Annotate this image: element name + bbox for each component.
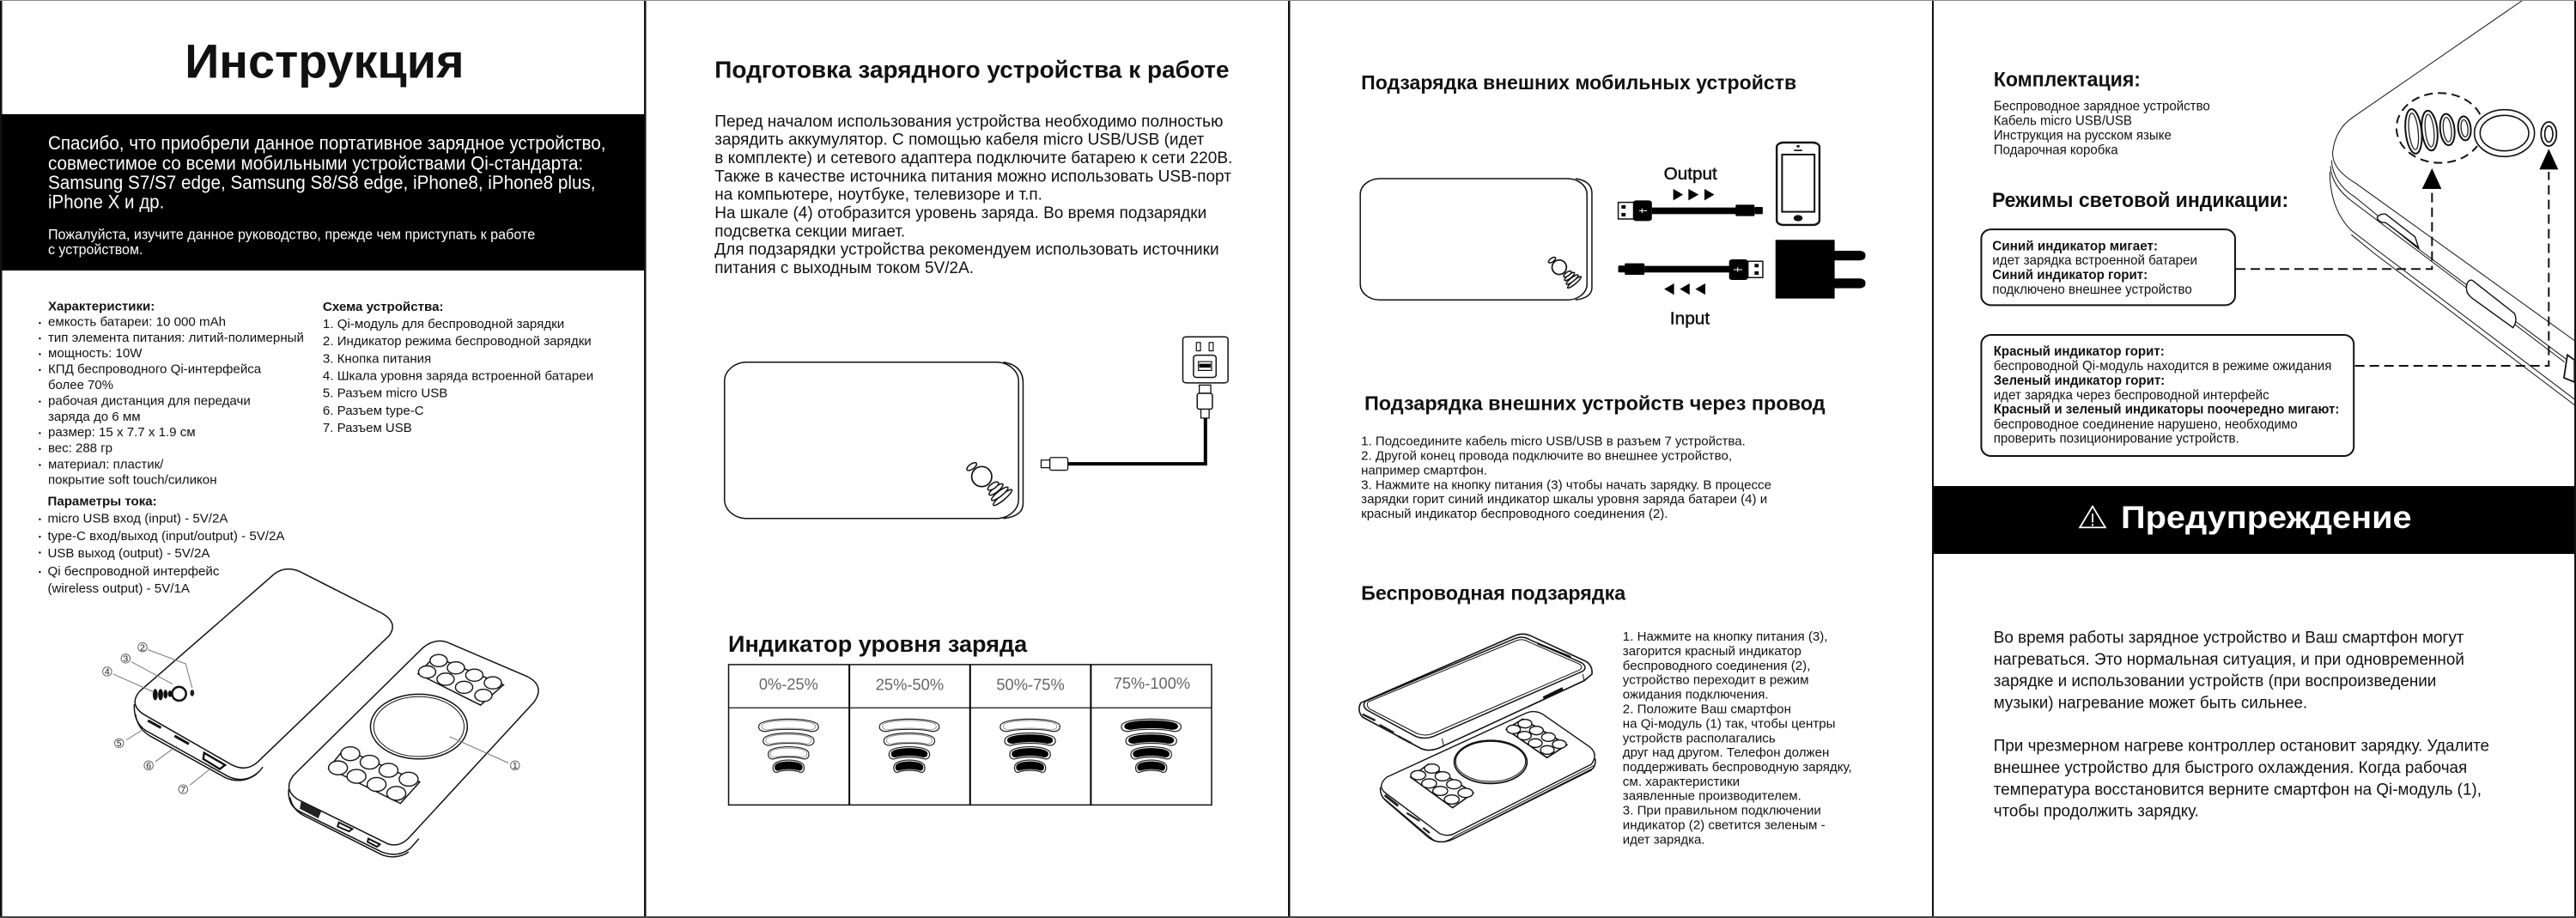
wireless charging steps: см. характеристики: [1623, 774, 1740, 788]
panel: preparation: [714, 57, 1232, 805]
package contents list: [1994, 99, 2210, 157]
callout: blue indicator: Синий индикатор горит:: [1992, 267, 2148, 282]
heading: wireless charging: Беспроводная подзарядка: [1361, 582, 1626, 605]
callout: wireless indicator: проверить позиционирование устройств.: [1994, 431, 2239, 446]
preparation body text: [714, 112, 1232, 277]
current parameters list: (wireless output) - 5V/1A: [47, 581, 191, 596]
device scheme list: 6. Разъем type-C: [323, 404, 424, 418]
callout: wireless indicator: Зеленый индикатор горит:: [1994, 373, 2165, 387]
preparation body text: На шкале (4) отобразится уровень заряда. Во время подзарядки: [714, 204, 1206, 222]
callout: wireless indicator: Красный индикатор горит:: [1994, 344, 2165, 359]
callout: wireless indicator: беспроводной Qi-модуль находится в режиме ожидания: [1994, 358, 2331, 373]
current parameters list: USB выход (output) - 5V/2A: [47, 546, 210, 561]
specifications list: рабочая дистанция для передачи: [48, 393, 251, 408]
illustration: power bank front: [103, 569, 519, 795]
intro text: с устройством.: [48, 241, 143, 258]
title: Инструкция: [185, 35, 464, 88]
wireless indicator oval: [2541, 122, 2556, 146]
power bank under phone: [1381, 712, 1595, 842]
heading: preparation: Подготовка зарядного устройства к работе: [714, 57, 1230, 83]
table: charge levels: 25%-50%: [876, 676, 944, 694]
device scheme list: 7. Разъем USB: [323, 421, 412, 435]
preparation body text: подсветка секции мигает.: [714, 222, 905, 240]
arrow: wireless indicator pointer: [2355, 149, 2558, 366]
specifications list: емкость батареи: 10 000 mAh: [48, 315, 226, 329]
device scheme list: [323, 300, 593, 435]
current parameters list: micro USB вход (input) - 5V/2A: [47, 512, 228, 526]
current parameters list: [39, 494, 285, 596]
wireless charging steps: на Qi-модуль (1) так, чтобы центры: [1623, 716, 1836, 731]
wireless charging steps: ожидания подключения.: [1623, 687, 1769, 702]
wireless charging steps: беспроводного соединения (2),: [1623, 658, 1810, 672]
callout numbers: 5: [117, 739, 122, 749]
device scheme list: Схема устройства:: [323, 300, 444, 314]
package contents list: Подарочная коробка: [1994, 143, 2118, 157]
specifications list: КПД беспроводного Qi-интерфейса: [48, 362, 262, 377]
illustration: power bank back: [289, 641, 538, 857]
wired charging steps: 1. Подсоедините кабель micro USB/USB в разъем 7 устройства.: [1361, 434, 1746, 448]
heading: wired charging: Подзарядка внешних устройств через провод: [1364, 392, 1826, 415]
level 4 indicator: [1121, 719, 1181, 772]
preparation body text: в комплекте) и сетевого адаптера подключите батарею к сети 220В.: [714, 149, 1232, 167]
warning band: [1933, 486, 2576, 554]
wireless charging steps: индикатор (2) светится зеленым -: [1623, 818, 1826, 832]
table: charge levels: 75%-100%: [1114, 675, 1190, 692]
wireless charging steps: устройств располагались: [1623, 731, 1776, 745]
specifications list: [39, 300, 304, 487]
intro text: Пожалуйста, изучите данное руководство, прежде чем приступать к работе: [48, 227, 535, 242]
wireless charging steps: устройство переходит в режим: [1623, 672, 1808, 687]
callout numbers: 7: [180, 786, 185, 795]
table: charge levels: 50%-75%: [996, 676, 1065, 694]
specifications list: мощность: 10W: [48, 346, 143, 361]
wireless charging steps: поддерживать беспроводную зарядку,: [1623, 759, 1852, 774]
callout: wireless indicator: беспроводное соединение нарушено, необходимо: [1994, 416, 2298, 431]
table: charge levels: 0%-25%: [759, 675, 818, 693]
callout numbers: [103, 643, 519, 795]
intro text: совместимое со всеми мобильными устройствами Qi-стандарта:: [48, 152, 583, 173]
specifications list: покрытие soft touch/силикон: [48, 472, 217, 487]
heading: charge level indicator: Индикатор уровня заряда: [728, 631, 1028, 657]
intro text: Спасибо, что приобрели данное портативное зарядное устройство,: [48, 132, 605, 154]
level 3 indicator: [1000, 719, 1060, 772]
specifications list: материал: пластик/: [48, 457, 164, 471]
callout: blue indicator: [1981, 229, 2235, 305]
callout: wireless indicator: Красный и зеленый индикаторы поочередно мигают:: [1994, 402, 2339, 416]
panel: contents and indicators: [1933, 0, 2576, 820]
preparation body text: Для подзарядки устройства рекомендуем использовать источники: [714, 240, 1219, 258]
black intro band: [2, 114, 644, 271]
package contents list: Кабель micro USB/USB: [1994, 113, 2132, 128]
intro text: [48, 132, 605, 258]
illustration: wall socket and cable: [1042, 337, 1228, 471]
warning heading: Предупреждение: [2121, 499, 2412, 535]
panel: cover page: [2, 35, 644, 857]
heading: external device charging: Подзарядка внешних мобильных устройств: [1361, 72, 1796, 94]
preparation body text: питания с выходным током 5V/2A.: [714, 258, 974, 277]
wired charging steps: 3. Нажмите на кнопку питания (3) чтобы начать зарядку. В процессе: [1361, 477, 1771, 492]
current parameters list: Параметры тока:: [47, 494, 157, 508]
wireless charging steps: 2. Положите Ваш смартфон: [1623, 702, 1791, 716]
illustration: power bank: [1360, 179, 1592, 300]
callout numbers: 2: [140, 644, 145, 653]
wired charging steps: красный индикатор беспроводного соединения (2).: [1361, 507, 1668, 520]
wireless charging steps: заявленные производителем.: [1623, 788, 1801, 803]
specifications list: размер: 15 x 7.7 x 1.9 см: [48, 425, 196, 440]
wireless charging steps: 1. Нажмите на кнопку питания (3),: [1623, 629, 1827, 643]
warning body text: чтобы продолжить зарядку.: [1994, 801, 2199, 820]
arrow: blue indicator pointer: [2236, 168, 2441, 269]
callout numbers: 4: [105, 668, 110, 678]
illustration: device corner close-up: [2330, 0, 2574, 405]
callout numbers: 6: [146, 762, 151, 771]
level 1 indicator: [759, 719, 818, 772]
package contents list: Беспроводное зарядное устройство: [1994, 99, 2210, 113]
preparation body text: на компьютере, ноутбуке, телевизоре и т.п.: [714, 185, 1042, 204]
specifications list: Характеристики:: [48, 300, 155, 314]
callout numbers: 1: [513, 762, 518, 771]
smartphone: [1359, 634, 1592, 751]
intro text: Samsung S7/S7 edge, Samsung S8/S8 edge, iPhone8, iPhone8 plus,: [48, 172, 596, 193]
callout numbers: 3: [123, 655, 128, 665]
wired charging steps: зарядки горит синий индикатор шкалы уровня заряда батареи (4) и: [1361, 492, 1767, 506]
wired charging steps: 2. Другой конец провода подключите во внешнее устройство,: [1361, 448, 1732, 463]
package contents list: Инструкция на русском языке: [1994, 128, 2172, 143]
specifications list: тип элемента питания: литий-полимерный: [48, 331, 304, 345]
preparation body text: Перед началом использования устройства необходимо полностью: [714, 112, 1223, 131]
device scheme list: 4. Шкала уровня заряда встроенной батареи: [323, 369, 593, 384]
output cable group: Output: [1664, 164, 1717, 184]
level 2 indicator: [879, 719, 939, 772]
input cable group: [1619, 259, 1763, 328]
wireless charging steps: загорится красный индикатор: [1623, 643, 1801, 658]
specifications list: вес: 288 гр: [48, 441, 112, 456]
wired charging steps: [1361, 434, 1771, 520]
table: charge levels: [729, 665, 1212, 805]
callout: blue indicator: Синий индикатор мигает:: [1992, 239, 2158, 253]
device scheme list: 3. Кнопка питания: [323, 351, 431, 366]
heading: package contents: Комплектация:: [1994, 69, 2141, 92]
illustration: phone on power bank: [1359, 634, 1595, 842]
wireless charging steps: идет зарядка.: [1623, 832, 1704, 847]
callout: blue indicator: подключено внешнее устройство: [1992, 283, 2192, 296]
device scheme list: 2. Индикатор режима беспроводной зарядки: [323, 334, 592, 349]
icon: wall adapter: [1776, 240, 1865, 299]
icon: smartphone: [1777, 143, 1820, 225]
input cable group: Input: [1670, 309, 1710, 328]
device scheme list: 1. Qi-модуль для беспроводной зарядки: [323, 317, 564, 331]
icon: warning triangle: [2080, 507, 2105, 527]
wireless charging steps: [1623, 629, 1852, 847]
illustration: power bank charging: [725, 362, 1023, 519]
charge indicator bars: [2403, 103, 2473, 155]
preparation body text: Также в качестве источника питания можно использовать USB-порт: [714, 167, 1231, 185]
intro text: iPhone X и др.: [48, 191, 164, 212]
specifications list: заряда до 6 мм: [48, 410, 141, 424]
heading: light modes: Режимы световой индикации:: [1992, 189, 2288, 212]
warning body text: музыки) нагревание может быть сильнее.: [1994, 693, 2307, 712]
wireless charging steps: друг над другом. Телефон должен: [1623, 745, 1829, 759]
output cable group: [1619, 164, 1763, 221]
preparation body text: зарядить аккумулятор. С помощью кабеля micro USB/USB (идет: [714, 131, 1204, 149]
callout: wireless indicator: [1981, 335, 2354, 456]
callout: blue indicator: идет зарядка встроенной батареи: [1992, 253, 2197, 268]
panel: charging: [1359, 72, 1865, 847]
current parameters list: type-C вход/выход (input/output) - 5V/2A: [47, 529, 285, 544]
specifications list: более 70%: [48, 378, 113, 392]
warning body text: [1994, 628, 2489, 820]
callout: wireless indicator: идет зарядка через беспроводной интерфейс: [1994, 387, 2269, 402]
power button ring: [2475, 110, 2535, 156]
current parameters list: Qi беспроводной интерфейс: [47, 564, 220, 579]
device scheme list: 5. Разъем micro USB: [323, 386, 447, 400]
wireless charging steps: 3. При правильном подключении: [1623, 803, 1821, 818]
wired charging steps: например смартфон.: [1361, 463, 1487, 477]
